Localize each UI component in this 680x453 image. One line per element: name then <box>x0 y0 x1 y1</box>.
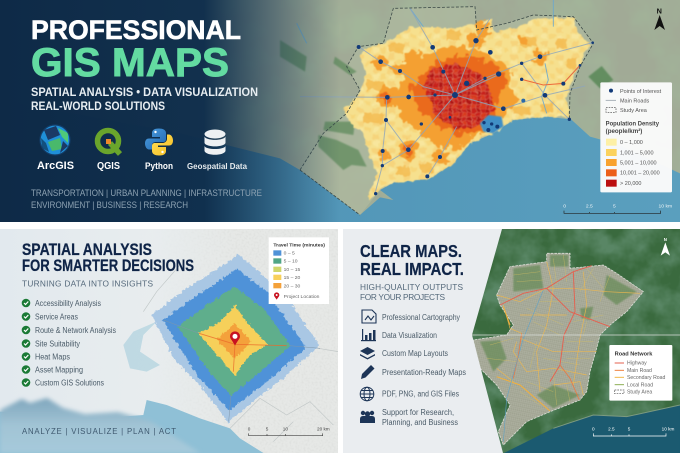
icon: ArcGIS globe <box>40 125 70 155</box>
map: study area <box>473 253 643 445</box>
scale bar: 2.5 <box>608 427 615 432</box>
legend: population density: 1,001 – 5,000 <box>620 150 654 156</box>
label: cartography: Professional Cartography <box>382 313 460 322</box>
scale bar: 0 <box>563 204 566 210</box>
checklist: Route & Network Analysis <box>35 326 116 335</box>
scale bar: 0 <box>592 427 595 432</box>
legend: travel time: 10 – 15 <box>284 267 301 273</box>
tagline: ANALYZE | VISUALIZE | PLAN | ACT <box>22 427 176 436</box>
title: GIS maps: GIS MAPS <box>31 41 229 85</box>
text: sectors: ENVIRONMENT | BUSINESS | RESEARCH <box>31 200 188 210</box>
label: support <box>382 408 458 427</box>
icon: globe <box>360 387 374 401</box>
legend: population density: (people/km²) <box>606 128 642 135</box>
legend: travel time: 0 – 5 <box>284 251 295 257</box>
scale bar: 2.5 <box>586 204 593 210</box>
heading <box>360 241 464 279</box>
subtitle <box>31 88 258 110</box>
icon: project location pin <box>230 331 240 346</box>
map: population density surface <box>343 17 590 200</box>
legend: travel time: 20 – 30 <box>284 283 301 289</box>
legend: travel time <box>269 237 329 304</box>
panel: clear maps <box>343 229 680 453</box>
legend: population density: 5,001 – 10,000 <box>620 160 657 166</box>
scale bar: 5 <box>613 204 616 210</box>
legend: road network: Secondary Road <box>627 375 666 381</box>
legend: road network: Main Road <box>627 368 652 374</box>
legend: road network: Local Road <box>627 382 653 388</box>
map: points of interest <box>357 38 594 195</box>
scale bar: 10 km <box>662 427 674 432</box>
icon: pencil <box>361 365 374 379</box>
label: Python: Python <box>145 161 173 172</box>
legend: road network: Study Area <box>627 390 652 396</box>
map: roads <box>487 255 640 442</box>
map: satellite road network <box>472 237 680 453</box>
heading: CLEAR MAPS. <box>360 241 462 261</box>
subtitle: SPATIAL ANALYSIS • DATA VISUALIZATION <box>31 87 258 99</box>
legend: population density: Main Roads <box>620 98 650 104</box>
legend: travel time: 5 – 10 <box>284 259 298 265</box>
icon: north arrow <box>654 6 665 30</box>
scale bar: 10 km <box>659 204 672 210</box>
checklist: Accessibility Analysis <box>35 299 101 308</box>
map: rivers <box>297 0 553 113</box>
legend: travel time: 15 – 20 <box>284 275 301 281</box>
icon: north arrow: N <box>657 6 662 15</box>
text: sectors <box>31 188 262 210</box>
panel: hero population density map <box>0 0 680 223</box>
subheading: HIGH-QUALITY OUTPUTS <box>360 282 463 292</box>
map: study area boundary <box>300 7 593 215</box>
heading <box>22 243 194 272</box>
icon: cartography document <box>362 310 376 323</box>
legend: travel time: Project Location <box>284 294 320 300</box>
legend: road network: Road Network <box>615 352 653 358</box>
scale bar <box>563 204 672 213</box>
icon: north arrow: N <box>664 237 667 242</box>
icon: QGIS <box>98 130 120 154</box>
legend: population density: 0 – 1,000 <box>620 140 643 146</box>
checklist: Asset Mapping <box>35 366 83 374</box>
scale bar: 0 <box>248 427 251 432</box>
map: urban water cluster <box>480 115 503 133</box>
heading: FOR SMARTER DECISIONS <box>22 257 194 275</box>
overlay: left fade <box>0 229 193 416</box>
icon: Python <box>145 128 173 156</box>
label: ArcGIS: ArcGIS <box>37 160 74 172</box>
label: file formats: PDF, PNG, and GIS Files <box>382 390 459 398</box>
checklist <box>22 299 116 388</box>
label: support: Support for Research, <box>382 408 454 417</box>
illustration: mountains <box>0 398 200 453</box>
title: professional: PROFESSIONAL <box>31 15 241 45</box>
line: horizontal seam <box>472 334 680 336</box>
label: presentation-ready maps: Presentation-Ready Maps <box>382 368 466 377</box>
legend: population density: > 20,000 <box>620 181 642 187</box>
checklist: Site Suitability <box>35 340 80 348</box>
legend: travel time: Travel Time (minutes) <box>273 242 325 248</box>
text: sectors: TRANSPORTATION | URBAN PLANNING | INFRASTRUCTURE <box>31 188 262 198</box>
map: sea and coastline <box>213 0 680 222</box>
icon: north arrow <box>661 237 670 256</box>
subheading <box>360 282 463 302</box>
label: data visualization: Data Visualization <box>382 331 437 340</box>
legend: population density: Population Density <box>606 121 660 128</box>
legend: road network: Highway <box>627 361 647 367</box>
legend: population density: Study Area <box>620 108 648 114</box>
map: isochrones and sea <box>0 254 338 453</box>
icon: geospatial database <box>204 130 226 155</box>
subheading: TURNING DATA INTO INSIGHTS <box>22 278 153 288</box>
scale bar <box>592 427 674 436</box>
scale bar: 20 km <box>317 427 330 432</box>
panel: text background <box>343 229 503 453</box>
subheading: FOR YOUR PROJECTS <box>360 292 445 302</box>
scale bar <box>248 427 330 436</box>
scale bar: 5 <box>266 427 269 432</box>
legend: road network <box>609 345 672 401</box>
checklist: Heat Maps <box>35 352 70 362</box>
overlay: dark navy gradient <box>0 0 340 222</box>
map: main roads <box>300 8 593 193</box>
scale bar: 5 <box>628 427 631 432</box>
subtitle: REAL-WORLD SOLUTIONS <box>31 101 165 113</box>
icon: people <box>360 411 375 423</box>
panel: spatial analysis <box>0 229 338 453</box>
checklist: Custom GIS Solutions <box>35 378 104 388</box>
legend: population density: Points of Interest <box>620 89 662 95</box>
heading: REAL IMPACT. <box>360 259 464 279</box>
icon: layers <box>360 347 375 360</box>
label: support: Planning, and Business <box>382 418 458 427</box>
map: study area interior <box>300 7 593 215</box>
label: QGIS: QGIS <box>97 161 120 172</box>
legend: population density: 10,001 – 20,000 <box>620 171 660 177</box>
checklist: Service Areas <box>35 312 78 322</box>
label: geospatial data: Geospatial Data <box>187 161 247 171</box>
label: map layouts: Custom Map Layouts <box>382 349 448 358</box>
scale bar: 10 <box>283 427 288 432</box>
map: forest patches <box>280 40 613 170</box>
legend: population density <box>600 82 672 192</box>
heading: SPATIAL ANALYSIS <box>22 241 152 259</box>
icon: bar chart <box>361 329 376 341</box>
chart: travel time isochrones <box>152 254 320 422</box>
